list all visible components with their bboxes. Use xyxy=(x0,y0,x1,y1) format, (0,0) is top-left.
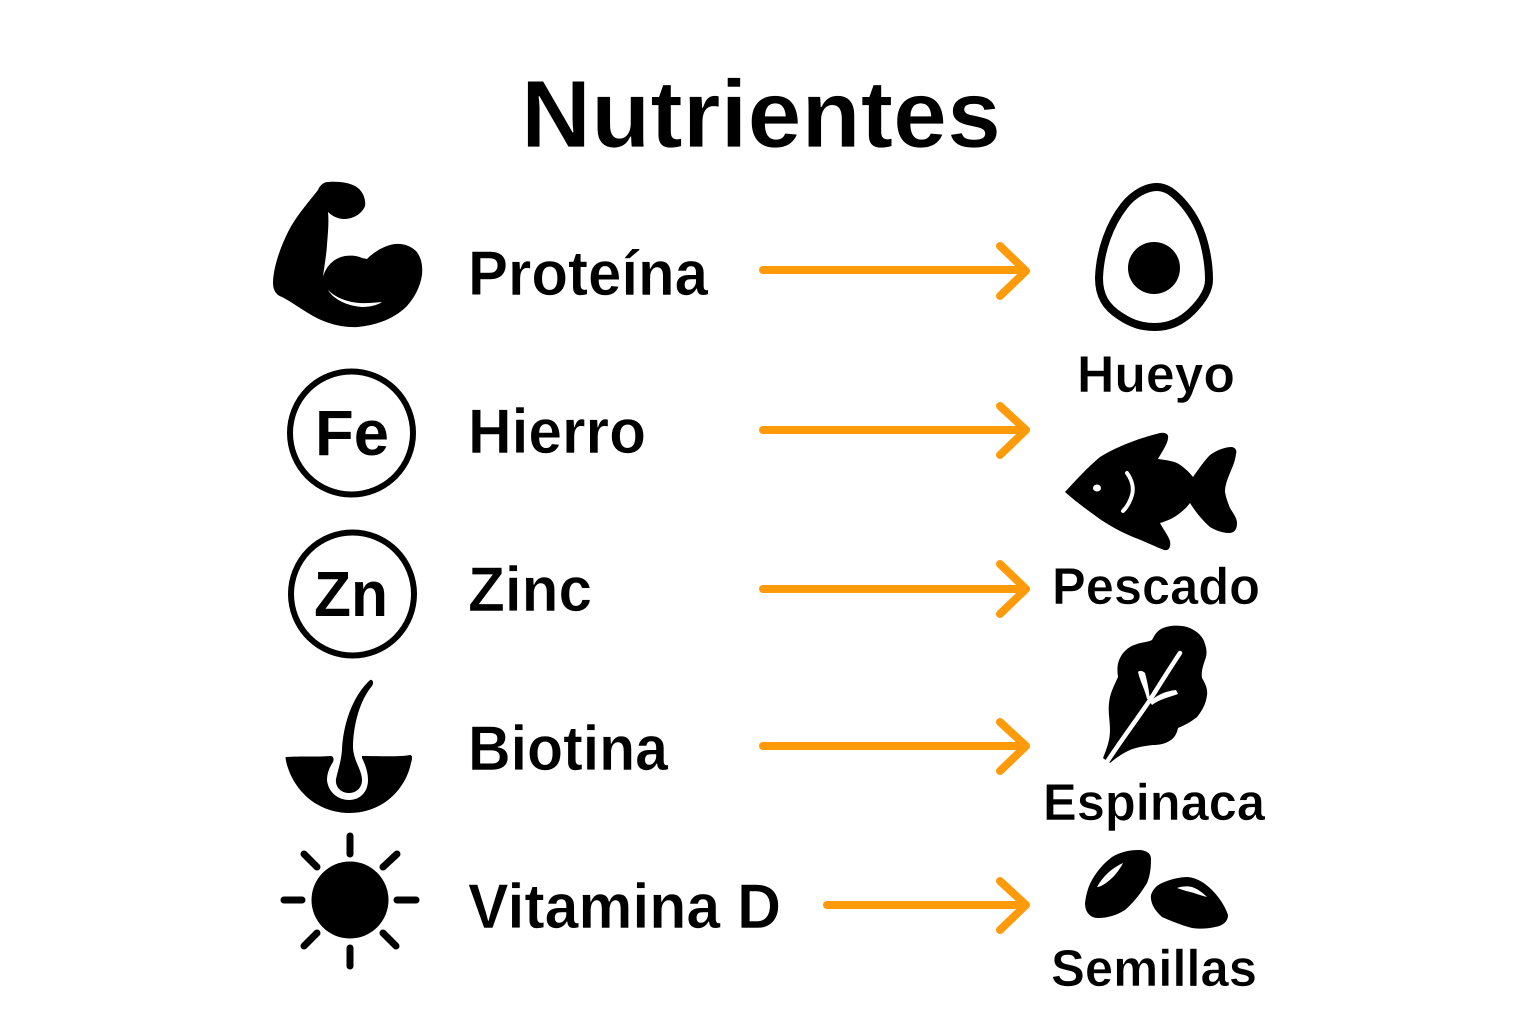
label: Hierro: Hierro xyxy=(468,397,646,467)
arrow: Biotina to Semillas xyxy=(763,722,1026,771)
icon: zinc: Zn xyxy=(314,558,388,630)
label: Espinaca: Espinaca xyxy=(1043,774,1266,832)
icon: fish xyxy=(1065,433,1237,550)
label: Hueyo: Hueyo xyxy=(1077,346,1235,404)
icon: iron xyxy=(290,372,413,494)
label: Zinc: Zinc xyxy=(468,555,592,625)
icon: muscle xyxy=(273,182,422,327)
icon: hair follicle xyxy=(286,680,412,813)
arrow: Hierro to Pescado xyxy=(763,406,1026,455)
icon: sun xyxy=(284,836,416,966)
icon: egg xyxy=(1099,187,1209,327)
label: Proteína: Proteína xyxy=(468,239,709,309)
label: Pescado: Pescado xyxy=(1052,558,1260,616)
icon: iron: Fe xyxy=(315,397,389,469)
label: Semillas: Semillas xyxy=(1051,940,1257,998)
label: Biotina: Biotina xyxy=(468,714,669,784)
icon: seeds xyxy=(1085,850,1228,929)
label: Vitamina D: Vitamina D xyxy=(468,872,781,942)
icon: zinc xyxy=(291,532,414,656)
arrow: Proteína to Huevo xyxy=(763,246,1026,296)
arrow: Zinc to Espinaca xyxy=(763,564,1026,614)
arrow: Vitamina D to Semillas xyxy=(827,881,1026,930)
icon: spinach xyxy=(1103,626,1207,763)
title: Nutrientes xyxy=(521,61,1001,168)
